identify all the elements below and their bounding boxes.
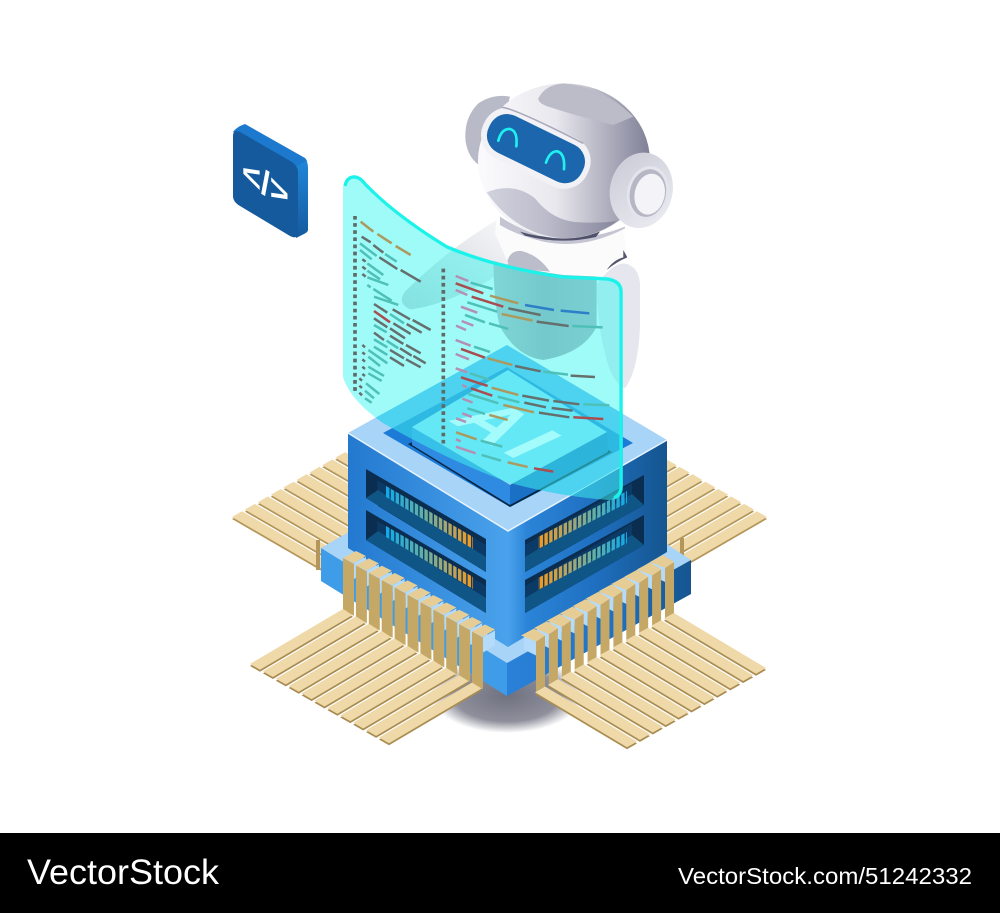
icon side	[296, 161, 308, 238]
brand name: VectorStock	[27, 853, 220, 892]
shoulder shadow	[607, 250, 627, 270]
glass bright edge	[345, 177, 621, 498]
red code	[374, 283, 603, 472]
image url: VectorStock.com/51242332	[678, 863, 972, 889]
torso	[493, 220, 627, 360]
right arm	[597, 263, 640, 388]
watermark bar	[0, 833, 1000, 913]
rim tint beneath glass	[376, 345, 623, 496]
line numbers	[355, 216, 443, 444]
visor frame	[472, 99, 599, 197]
visor screen	[481, 108, 591, 190]
top panel	[538, 83, 633, 125]
left arm	[402, 220, 508, 309]
eyes	[498, 129, 564, 169]
robot head	[465, 83, 680, 241]
AI letters on processor: AI	[431, 391, 587, 471]
lower band	[487, 188, 617, 238]
left face indicator bars	[386, 486, 473, 589]
top edge highlight	[348, 433, 667, 531]
back left gold pins	[232, 452, 455, 583]
under-glass belly tint	[493, 253, 597, 360]
neck collar	[500, 217, 625, 244]
holographic glass screen	[343, 175, 623, 500]
back right gold pins	[544, 452, 767, 583]
right ear	[603, 147, 680, 234]
head sphere	[478, 83, 650, 239]
code lines on glass	[355, 216, 609, 472]
icon top edge	[233, 124, 307, 168]
icon glyph: </>	[242, 150, 289, 217]
right face indicator bars	[538, 491, 627, 590]
tan code	[361, 222, 534, 467]
mauve code	[456, 276, 477, 453]
chip body	[348, 345, 667, 647]
top face	[348, 345, 667, 531]
front left gold pins	[250, 551, 495, 745]
front right gold pins	[521, 555, 766, 749]
dark code	[359, 237, 595, 417]
left ear	[465, 96, 510, 166]
left face server slots	[366, 469, 486, 613]
visor top rim	[502, 107, 583, 143]
recess in top face	[383, 367, 633, 507]
ground shadow under chip	[431, 657, 583, 733]
chip base plate	[321, 440, 691, 696]
AI processor block	[408, 370, 612, 507]
right face server slots	[525, 475, 644, 613]
teal code	[360, 243, 609, 461]
code tag icon	[233, 124, 308, 238]
blue code	[525, 305, 589, 313]
left face	[348, 433, 508, 647]
robot body	[402, 217, 640, 388]
elbow patch	[507, 251, 550, 272]
neck ring	[520, 232, 600, 241]
right face	[508, 440, 667, 647]
icon face	[233, 131, 298, 237]
